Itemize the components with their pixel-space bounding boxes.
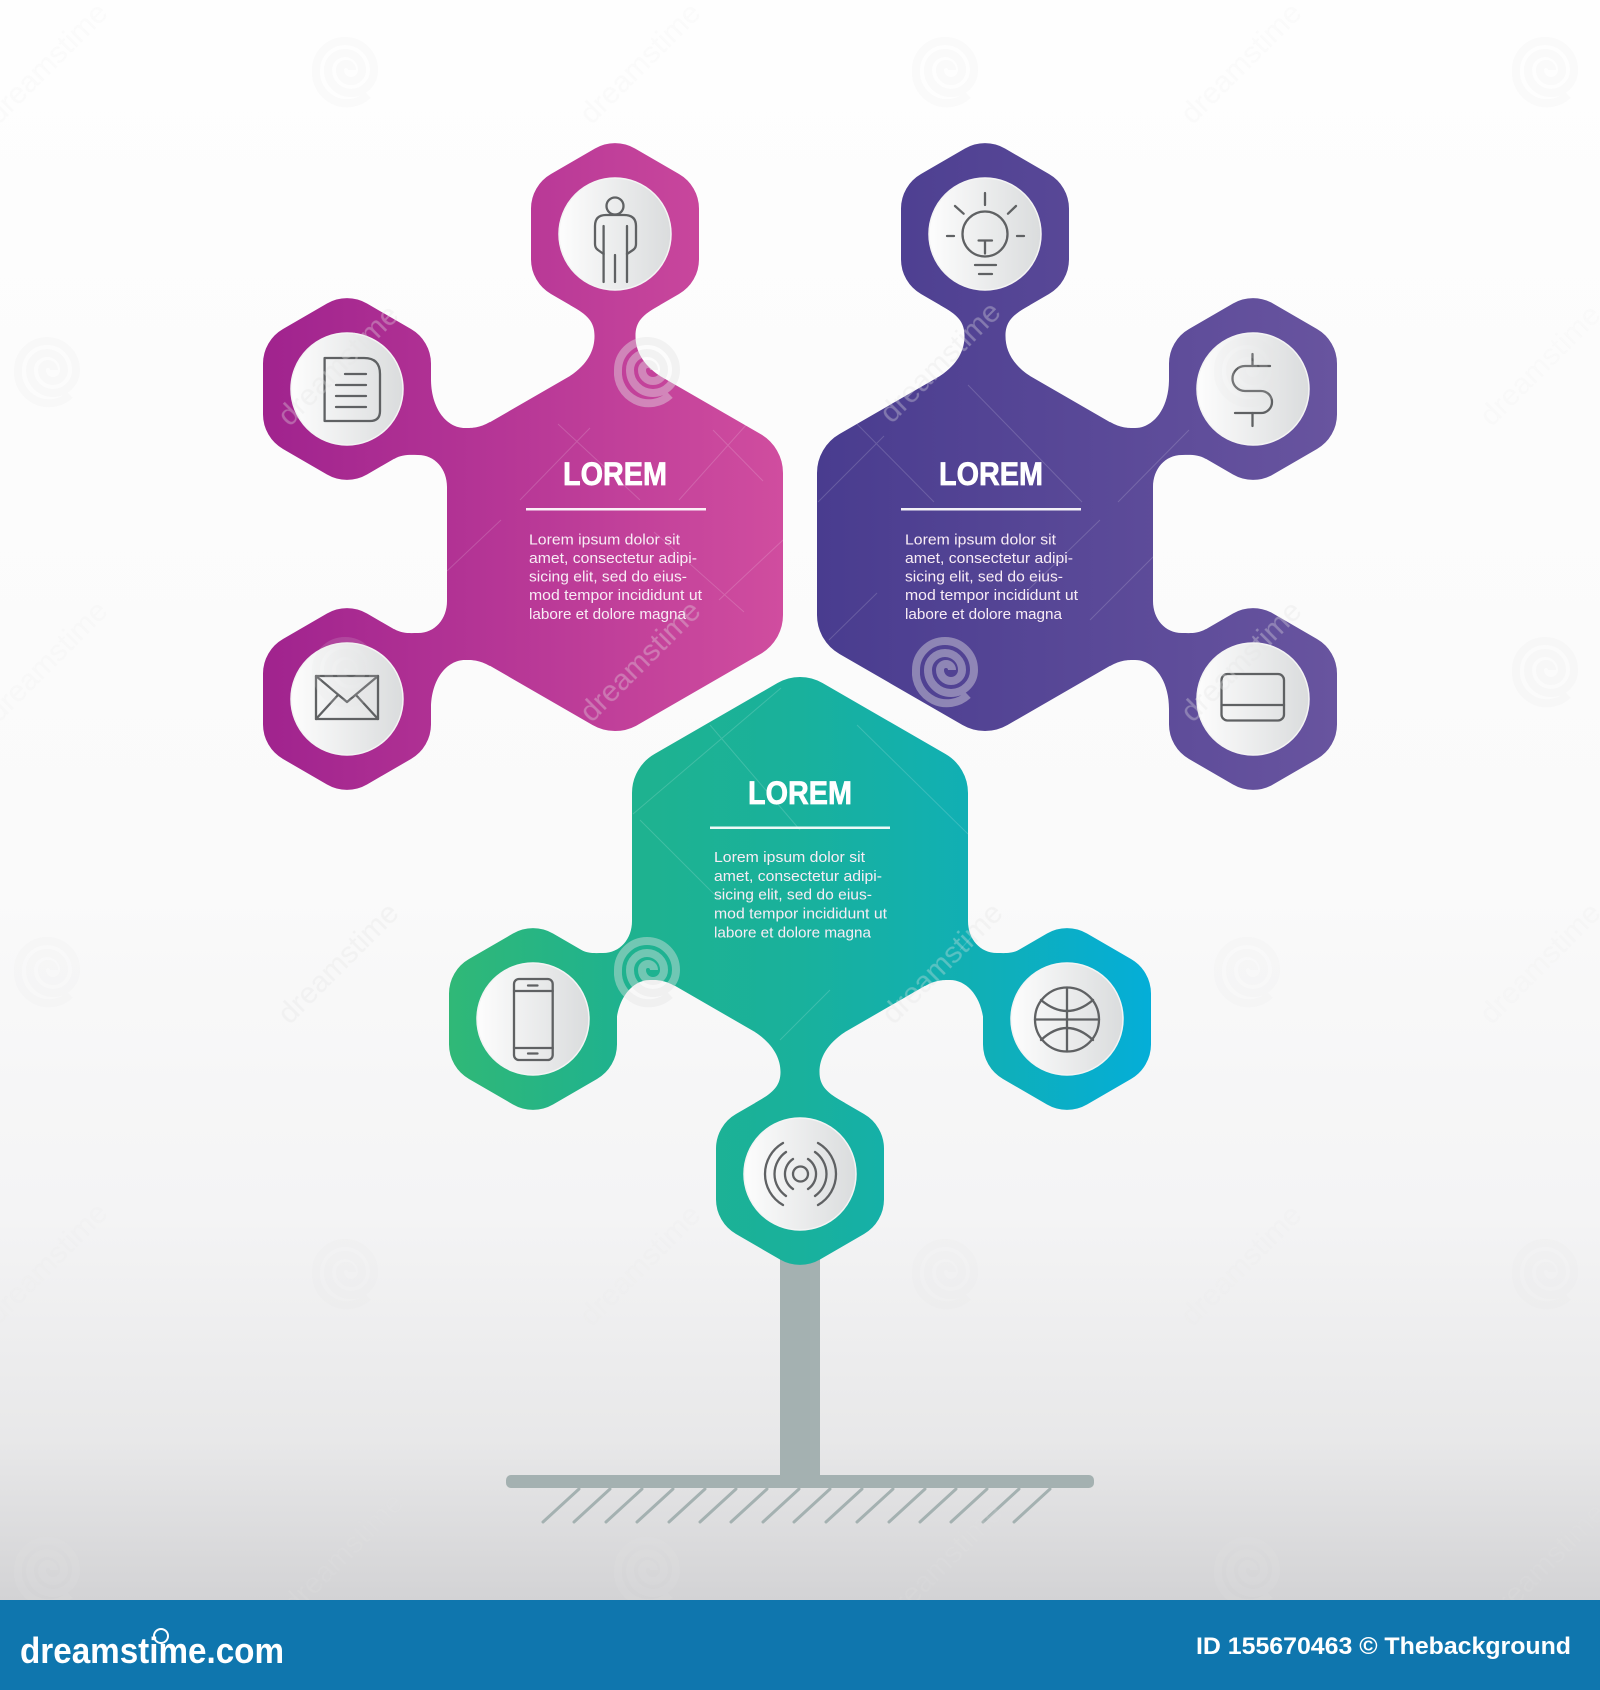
panel: teal group: [449, 677, 1151, 1265]
watermark overlay: dreamstime: [573, 0, 707, 130]
text block: teal: mod tempor incididunt ut: [714, 906, 887, 922]
divider: teal: [710, 826, 890, 829]
text block: teal: sicing elit, sed do eius-: [714, 888, 872, 904]
icon: envelope: [291, 643, 403, 755]
text block: magenta: Lorem ipsum dolor sit: [529, 532, 680, 548]
panel: magenta group: [263, 143, 783, 790]
watermark overlay: dreamstime: [875, 896, 1009, 1030]
text block: purple: [905, 532, 1078, 623]
text block: purple: Lorem ipsum dolor sit: [905, 532, 1056, 548]
watermark overlay: dreamstime: [271, 298, 405, 432]
heading: purple: LOREM: [939, 456, 1043, 492]
watermark overlay: dreamstime: [1174, 0, 1308, 130]
text block: magenta: amet, consectetur adipi-: [529, 551, 697, 567]
watermark overlay: dreamstime: [873, 295, 1007, 429]
icon: smartphone: [477, 963, 589, 1075]
purple shape: [817, 143, 1337, 790]
footer image id: ID 155670463 © Thebackground: [1196, 1633, 1571, 1660]
text block: teal: amet, consectetur adipi-: [714, 869, 882, 885]
icon: dollar: [1197, 333, 1309, 445]
text block: magenta: [529, 532, 702, 623]
heading: magenta: LOREM: [563, 456, 667, 492]
watermark overlay: dreamstime: [1174, 1198, 1308, 1332]
icon: credit card: [1197, 643, 1309, 755]
heading: teal: LOREM: [748, 775, 852, 811]
panel: purple group: [817, 143, 1337, 790]
text block: teal: [714, 850, 887, 942]
divider: purple: [901, 508, 1081, 510]
icon: signal: [744, 1118, 856, 1230]
footer band: [0, 1600, 1600, 1690]
text block: purple: labore et dolore magna: [905, 607, 1063, 623]
watermark overlay: dreamstime: [573, 1198, 707, 1332]
watermark overlay: dreamstime: [276, 1486, 410, 1620]
text block: magenta: mod tempor incididunt ut: [529, 588, 702, 604]
watermark overlay: dreamstime: [875, 1496, 1009, 1630]
divider: magenta: [526, 508, 706, 510]
text block: purple: mod tempor incididunt ut: [905, 588, 1078, 604]
magenta shape: [263, 143, 783, 790]
watermark overlay: dreamstime: [1174, 594, 1308, 728]
text block: magenta: sicing elit, sed do eius-: [529, 570, 687, 586]
watermark overlay: dreamstime: [271, 896, 405, 1030]
icon: person: [559, 178, 671, 290]
text block: purple: amet, consectetur adipi-: [905, 551, 1073, 567]
stand: stem, base bar and ground hatching: [506, 1250, 1094, 1522]
text block: teal: Lorem ipsum dolor sit: [714, 850, 865, 866]
icon: light bulb: [929, 178, 1041, 290]
icon: basketball: [1011, 963, 1123, 1075]
footer logo: dreamstime.com: [20, 1630, 284, 1671]
text block: purple: sicing elit, sed do eius-: [905, 570, 1063, 586]
icon: document: [291, 333, 403, 445]
watermark overlay: dreamstime: [573, 594, 707, 728]
text block: teal: labore et dolore magna: [714, 926, 872, 942]
teal shape: [449, 677, 1151, 1265]
text block: magenta: labore et dolore magna: [529, 607, 687, 623]
